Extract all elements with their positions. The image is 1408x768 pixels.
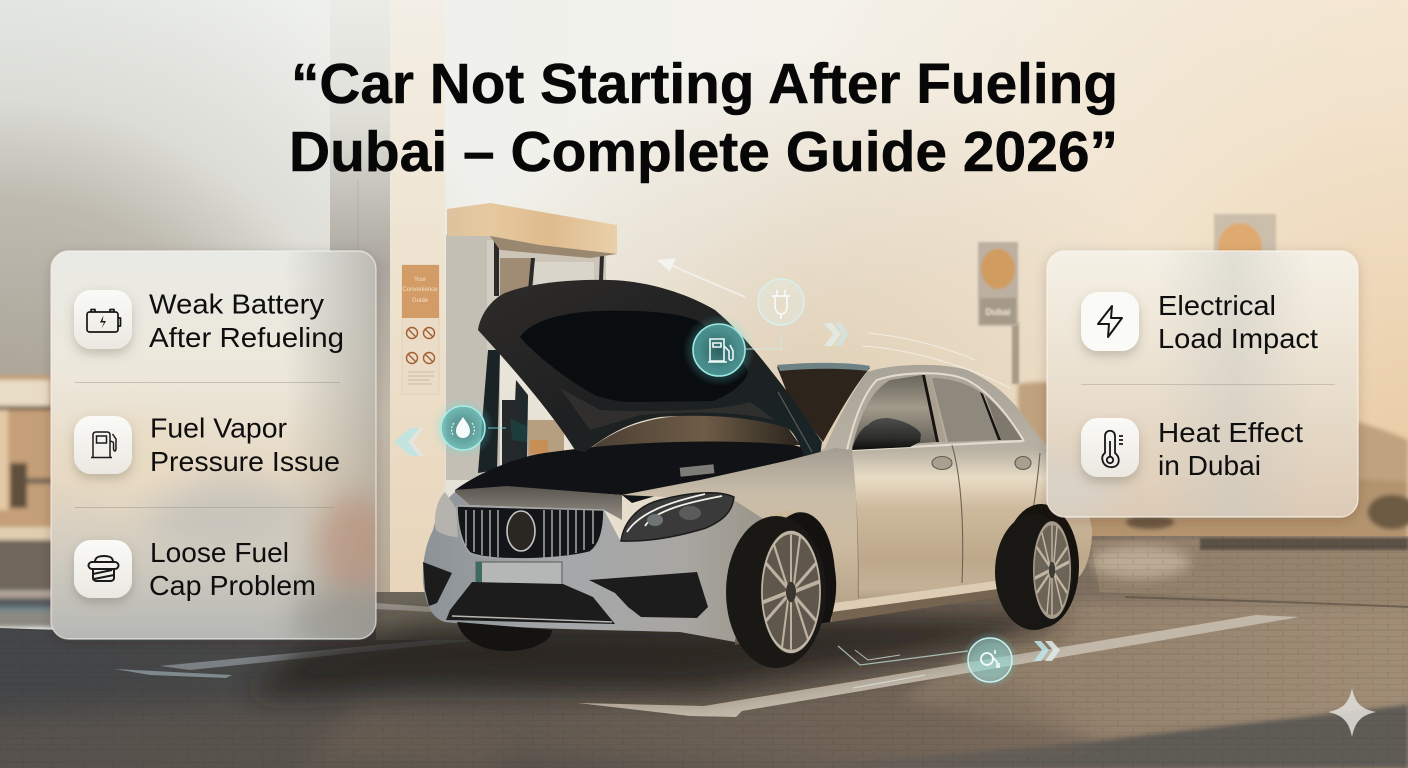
door lines and handles <box>852 445 1040 598</box>
chevrons bottom <box>1034 641 1060 661</box>
fender top <box>622 448 858 603</box>
grille <box>457 506 604 559</box>
ground shadow under car <box>250 610 1070 695</box>
desert bushes <box>1126 495 1408 529</box>
title: Dubai – Complete Guide 2026” <box>289 120 1118 184</box>
rear wheel <box>995 504 1079 630</box>
item: loose fuel cap: Loose Fuel <box>150 537 289 568</box>
sign right near <box>978 242 1019 384</box>
intakes <box>423 562 708 624</box>
glow icon: gauge <box>961 631 1019 689</box>
sparkle mark <box>1328 688 1376 737</box>
canopy <box>447 203 617 254</box>
sill <box>832 578 1020 612</box>
item: weak battery: After Refueling <box>149 322 344 353</box>
pump columns and hose <box>478 350 500 473</box>
nose panel <box>455 486 622 520</box>
icon: thermometer <box>1102 431 1123 467</box>
icon: fuel pump <box>91 432 116 458</box>
digital overlay: arrow and connecting lines <box>488 258 1010 688</box>
panel: causes left <box>51 251 410 650</box>
ground <box>0 536 1408 768</box>
front left tire <box>457 622 552 651</box>
left blurred building <box>0 375 60 627</box>
item: electrical load <box>1081 290 1318 354</box>
headlights <box>435 492 734 541</box>
warning sign: Guide <box>412 298 429 304</box>
item: fuel vapor <box>74 412 340 477</box>
item: electrical load: Load Impact <box>1158 323 1318 354</box>
engine bay <box>455 441 820 503</box>
panel: causes right <box>1000 251 1358 520</box>
item: weak battery <box>74 288 344 353</box>
icon: battery <box>87 310 120 332</box>
gas station pillar <box>330 0 470 640</box>
title: “Car Not Starting After Fueling <box>291 52 1118 116</box>
mirror <box>852 418 921 450</box>
item: electrical load: Electrical <box>1158 290 1276 321</box>
item: loose fuel cap: Cap Problem <box>149 570 316 601</box>
item: heat effect: in Dubai <box>1158 450 1261 481</box>
side windows <box>847 373 1024 450</box>
windshield <box>777 364 870 442</box>
car <box>423 280 1092 668</box>
item: weak battery: Weak Battery <box>149 288 324 320</box>
chevrons left <box>394 428 424 456</box>
item: heat effect <box>1081 417 1303 481</box>
glow icon: plug <box>758 279 804 325</box>
icon: fuel cap <box>88 556 118 581</box>
wheel arch <box>745 512 836 640</box>
glow icon: fuel pump <box>683 314 755 386</box>
body side <box>735 365 1092 645</box>
warning sign: Convenience <box>402 287 438 293</box>
glow icon: drop <box>432 397 494 459</box>
license plate <box>476 562 562 588</box>
parking lines <box>115 615 1300 717</box>
front wheel <box>726 516 826 668</box>
front bumper <box>423 492 772 642</box>
item: loose fuel cap <box>74 537 316 601</box>
item: fuel vapor: Pressure Issue <box>150 446 340 477</box>
warning sign: Your <box>414 277 426 283</box>
sign right far <box>1214 214 1276 271</box>
item: fuel vapor: Fuel Vapor <box>150 412 287 444</box>
distant dunes <box>1018 382 1408 560</box>
sign right near: Dubai <box>985 307 1011 317</box>
under-hood glass <box>586 415 800 455</box>
chevrons right top <box>824 323 848 346</box>
icon: lightning bolt <box>1098 306 1122 337</box>
warning sign <box>402 265 439 394</box>
item: heat effect: Heat Effect <box>1158 417 1303 448</box>
open hood <box>478 280 822 458</box>
title <box>289 52 1118 184</box>
fuel pump structure <box>446 203 617 480</box>
